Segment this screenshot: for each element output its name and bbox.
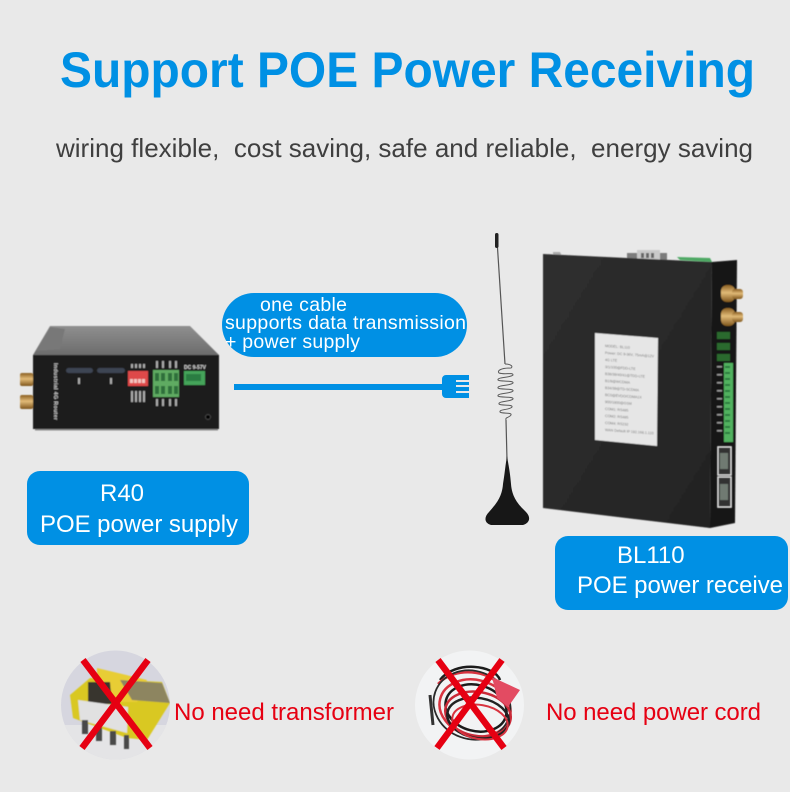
label: BL110: BL110 [617,542,685,569]
label: BL110 [555,536,788,610]
title: Support POE Power Receiving [60,42,755,98]
product label: 4G LTE [605,358,618,363]
callout: one cable: + power supply [225,331,360,353]
terminal block [717,363,733,442]
router R40 device [20,326,219,430]
antenna [485,233,529,525]
subtitle: wiring flexible, cost saving, safe and reliable, energy saving [55,133,753,163]
cable and connector arrow [234,375,469,398]
callout: one cable: one cable [260,294,347,316]
product label: COM2: RS485 [605,414,628,420]
text: no need transformer: No need transformer [174,699,394,726]
antenna connectors [20,373,33,409]
product label: 900/1800@GSM [605,400,632,406]
callout: one cable: supports data transmission [225,312,466,334]
label: R40 [27,471,249,545]
product label: BC0@EVDO/CDMA1X [605,393,642,400]
red cross [437,660,504,748]
product label: Power: DC 9-36V, 75mA@12V [605,351,655,358]
text: no need power cord: No need power cord [546,699,761,726]
product label: MODEL: BL110 [605,344,630,350]
router R40 device: Industrial 4G Router [52,363,58,421]
product label: COM4: RS232 [605,421,628,427]
product label: B34/39@TD-SCDMA [605,386,640,392]
gateway BL110 device [543,250,743,528]
antenna connectors [721,285,743,326]
product label: COM1: RS485 [605,407,628,413]
label: R40: R40 [100,480,144,507]
callout: one cable [222,293,467,357]
product label: 3/1/100@FDD-LTE [605,365,636,371]
label: R40: POE power supply [40,511,238,538]
LED indicators [717,332,730,361]
red cross [82,660,150,748]
label: BL110: POE power receive [577,572,783,599]
icon: transformer crossed out [61,650,170,750]
product label: B38/39/40/41@TDD-LTE [605,372,645,379]
product label: WAN Default IP 192.168.1.110 [605,428,654,435]
ethernet ports [718,447,731,507]
router R40 device: DC 9-57V [184,365,207,371]
product label: B1/8@WCDMA [605,379,631,385]
product label [595,333,658,446]
icon: power cord crossed out [415,650,524,760]
